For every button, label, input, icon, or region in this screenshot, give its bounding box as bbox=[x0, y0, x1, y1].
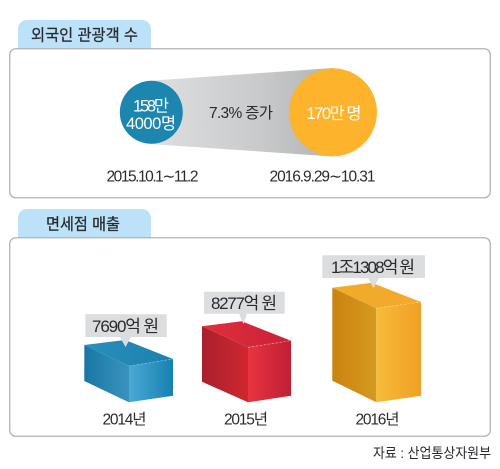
circle: 2015 visitors bbox=[120, 81, 183, 144]
callout: 2016 value bbox=[322, 255, 425, 288]
tab: foreign tourists heading bbox=[18, 20, 151, 49]
label: 2015 period: 2015.10.1∼11.2 bbox=[106, 168, 198, 186]
label: 2016 period: 2016.9.29∼10.31 bbox=[270, 168, 376, 186]
circle: 2016 visitors bbox=[289, 68, 377, 156]
circle: 2015 visitors: 4000명 bbox=[126, 114, 176, 133]
bar: 2014 bbox=[84, 314, 173, 428]
cone: growth connector bbox=[150, 68, 333, 156]
callout: 2016 value: 1조1308억 원 bbox=[331, 258, 415, 277]
circle: 2015 visitors: 158만 bbox=[133, 96, 169, 116]
circle: 2016 visitors: 170만 명 bbox=[306, 104, 362, 123]
source note: 자료 : 산업통상자원부 bbox=[373, 445, 491, 461]
label: 2016: 2016년 bbox=[356, 410, 400, 428]
callout: 2014 value: 7690억 원 bbox=[92, 317, 159, 336]
callout: 2015 value: 8277억 원 bbox=[211, 294, 277, 313]
panel: duty free sales bbox=[10, 238, 490, 436]
bar: 2015 bbox=[202, 292, 291, 428]
tab: duty free sales heading bbox=[18, 209, 151, 238]
panel: foreign tourists bbox=[10, 49, 490, 198]
bar: 2016 bbox=[322, 255, 425, 428]
label: growth rate: 7.3% 증가 bbox=[209, 104, 273, 122]
tab: duty free sales heading: 면세점 매출 bbox=[46, 216, 120, 234]
tab: foreign tourists heading: 외국인 관광객 수 bbox=[31, 26, 138, 44]
label: 2014: 2014년 bbox=[102, 410, 146, 428]
label: 2015: 2015년 bbox=[224, 410, 268, 428]
